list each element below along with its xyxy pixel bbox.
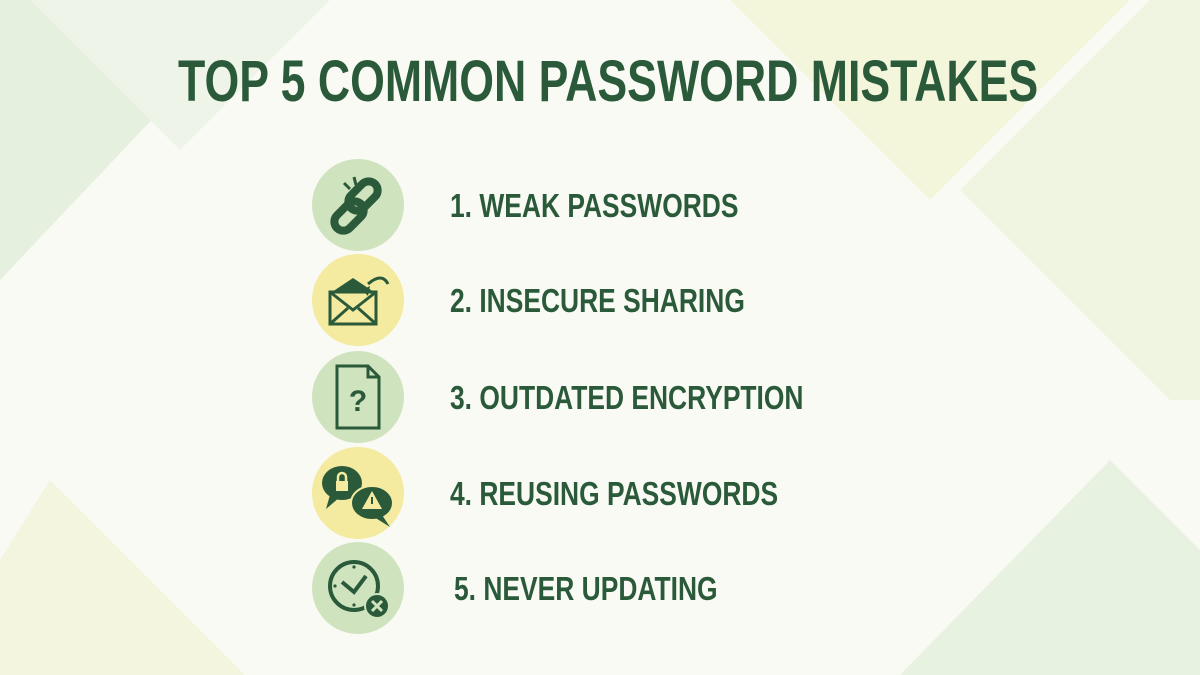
- item 4: [312, 447, 778, 539]
- icon: document question: [312, 351, 404, 443]
- label: 3. OUTDATED ENCRYPTION: [450, 379, 803, 416]
- icon: chat bubbles: [312, 447, 404, 539]
- title: TOP 5 COMMON PASSWORD MISTAKES: [178, 49, 1038, 114]
- icon: clock with x: [312, 542, 404, 634]
- item 2: [312, 254, 745, 346]
- label: 4. REUSING PASSWORDS: [450, 475, 778, 512]
- icon: document question: ?: [349, 385, 367, 418]
- item 5: [312, 542, 718, 634]
- item 1: [312, 159, 738, 251]
- label: 5. NEVER UPDATING: [454, 570, 718, 607]
- icon: broken link: [312, 159, 404, 251]
- label: 2. INSECURE SHARING: [450, 282, 745, 319]
- icon: envelope: [312, 254, 404, 346]
- label: 1. WEAK PASSWORDS: [450, 187, 738, 224]
- item 3: [312, 351, 803, 443]
